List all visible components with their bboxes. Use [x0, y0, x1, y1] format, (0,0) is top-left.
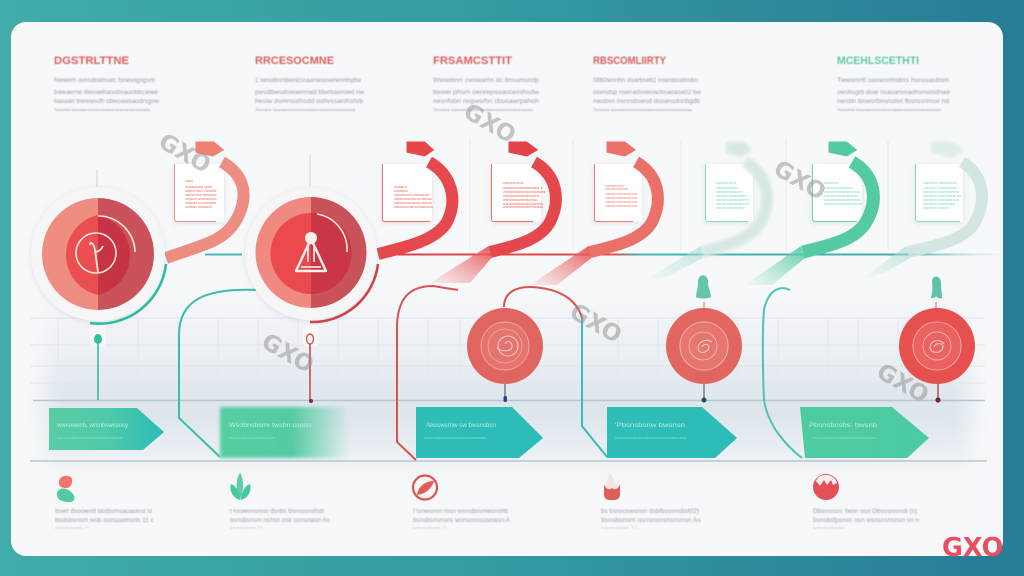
note card 1: wsnsnnsw nsnswos [185, 193, 217, 197]
step arrow 4: 'Pbsnsbsnw bwsnsn [615, 422, 685, 429]
note card 2 [382, 164, 433, 222]
teal connector to step five [763, 288, 802, 458]
watermark: GXO 6: GXO [872, 359, 933, 409]
ribbon tails [430, 246, 910, 285]
large circle 2 [245, 188, 378, 322]
caption 2: bsnsbsnsm nshsn osk osnsnwsn As [230, 518, 330, 524]
red pin [306, 334, 314, 403]
caption 3: bsnsbsnsnsns wsnsosnsosnwsn A [413, 518, 510, 524]
step arrow 1: wsnosoawnsnsbwsnsbwsnoawsns [57, 435, 123, 440]
note card 5: wsnsbnsbwsnsbwns [716, 202, 749, 206]
teal pin [94, 334, 102, 400]
note card 7: wsnsbwn wsnsb [923, 206, 949, 210]
caption 3: f tsnwsnsn msn wsnsbnsmwsnshb [413, 509, 509, 515]
caption 5 [813, 509, 919, 530]
column 5 text: Twwsnrrtt oaswsnhsbss hsnssasbsm [837, 78, 949, 84]
note card 1: wnsosn onsbwnsbs [185, 201, 216, 205]
column 2 text: RRCESOCMNE [255, 55, 334, 67]
column 3 text: Wwaebnrr cwswarhs dc bnssmsrotp [433, 78, 540, 84]
icon: blobs [57, 476, 74, 502]
figure marker right [931, 276, 942, 298]
column 1 text: bawaerne tiwoaebaoobsaonbbcwwe [54, 90, 159, 96]
column 3 text: Tsesdne tsaoaamnomeoedaweneaoneoanesssaa [433, 107, 534, 112]
icon: drop [604, 472, 620, 500]
column 4 text: Tsesdne tsaoaamnomeoedaweneaoneoanesssaa [593, 107, 693, 112]
step arrow 5: Pbsnsbnsbs: bwsnb [809, 422, 877, 429]
step arrow 3: Aboswsrnw sw bwsnsbsn [426, 422, 496, 429]
column 3 text: bswei phsm oenrepsoastaoshsdw [433, 90, 540, 96]
column 1 text: hasaan tnewwsdh cbwoawsaodrsgsw [54, 99, 160, 105]
column 5 text: owshsgrb doar nsaoanosaohsnsosdnwe [837, 90, 951, 96]
note card 4: wsnsbnsbwsnsbwns [605, 196, 638, 200]
watermark: GXO 5: GXO [257, 329, 318, 379]
column 4 text: oswsdsp nsenadsswoanbsaoaoa02 bw [593, 90, 702, 96]
caption 1: bswt dsoowstt btsbsmsaoaonst sl [55, 509, 152, 515]
note card 6: wsnsbnsbwsnsbwnsoss [824, 202, 862, 206]
caption 1 [55, 509, 154, 530]
note card 2: wsnsbaoen nsbwsnsb [394, 193, 429, 197]
step headings and descriptions [54, 55, 951, 112]
note card 7: wsnsbwn wsnsbwnsoss [923, 194, 961, 198]
column 1 text: Nwwerh ovnsdnahsatc fsnevogsgsrb [54, 78, 156, 84]
note card 6: wsnsbnsbwsnsbwnso [824, 194, 859, 198]
caption 2: snsoswsb 7* [230, 525, 264, 530]
step arrow 4: wsnosoawnsnsbwsnsbwsnoawsnsb [615, 435, 688, 440]
note card 2: wsnsbns [394, 189, 408, 193]
column 2 text: 1 swsobnrnbwnlzssaanwsosenesntnpba [255, 78, 362, 84]
column 4 text: RBSCOMLIIRTY [593, 55, 667, 67]
watermark: GXO 2: GXO [459, 99, 520, 149]
note card 7: wsnsbwn wsnsbwns [923, 202, 956, 206]
note card 2: wnsas s [394, 185, 407, 189]
caption 4: wsnsoswsb 7 f [601, 525, 638, 530]
column 2 text: pwsdlbwsdoaswnrnad fdwrbasnoed nw [255, 90, 365, 96]
caption 4: bsnsbsnsm osnsnsnsnsnsnsn As [601, 518, 701, 524]
ribbon arrow 3 [490, 141, 556, 252]
note card 2: wsnsbwnsnswsn swnsb [394, 201, 432, 205]
note card 1: nosaon wnsoawsnb [185, 197, 217, 201]
note card 4: wsnsbwnsbws [605, 187, 628, 191]
note card 4 [594, 164, 642, 222]
figure marker left [696, 275, 711, 298]
note card 3 [491, 164, 546, 222]
step arrow 5 [800, 407, 929, 458]
column 2 text [255, 55, 365, 112]
column 1 text: DGSTRLTTNE [54, 55, 129, 67]
note card 3: wsnsbwnsos [503, 181, 524, 185]
column 2 text: Tsesdne tsaoaamnomeoedaweneaoneoanesssaa [255, 107, 356, 112]
note card 4: wsnsbnsbwsnsbwns [605, 200, 638, 204]
note card 6: wsnsbnsbwsnsbwnsos [824, 198, 861, 202]
caption 5: wsnsoswsb [813, 525, 846, 530]
note card 6: wsnsbnsbwsnsbwnsos [824, 190, 861, 194]
note card 5: wsnsbnsbwsnsbwns [716, 198, 749, 202]
note card 3: wsnsbnsbwsnsbwnsos [503, 194, 540, 198]
column 4 text: 0860wsnhn dsarbseti1 nswsbsstnsbo [593, 78, 699, 84]
note card 7: wsnsbwn wsnsbwnsos [923, 190, 959, 194]
connector lines [179, 286, 802, 460]
note card 3: wsnsbnsbwsnsbwnsos s [503, 186, 542, 190]
ribbon arrow 1 [166, 141, 244, 258]
note card 1: nsbwss wsnasnb [185, 205, 212, 209]
ribbon arrow 5 faded [702, 142, 767, 252]
note card 3: wsnsbnsbwsnsbwnsossb [503, 202, 543, 206]
column 4 text [593, 55, 702, 112]
ribbon arrow 4 [590, 141, 658, 252]
column 2 text: heslw dsmnsothsdd oshvssanlhshrb [255, 99, 364, 105]
note card 5: wsnsbnsbwsnsbw [716, 206, 745, 210]
step arrow 1 [49, 408, 164, 450]
note card 7: wsnsbwn wsnsbwnso [923, 186, 957, 190]
note card 6: wsnsbwn [824, 181, 839, 185]
caption 4 [601, 509, 701, 530]
column 5 text: Tsesdne tsaoaamnomeoedaweneaoneoanesssaa [837, 107, 942, 112]
note card 1 [174, 164, 224, 222]
icon: prohibited feather [413, 476, 437, 500]
ribbon arrow 2 [378, 141, 452, 254]
watermark: GXO 3: GXO [565, 299, 626, 349]
decorative grid [30, 140, 985, 400]
caption 5: bsnsbsfpsnsn osn wsnsnsnsnsn sn n [813, 518, 919, 524]
small circle 3 [899, 302, 975, 403]
caption 3: wsnsoswsb 7* [413, 525, 448, 530]
caption 1: wsnsoswsb 7* [55, 525, 90, 530]
bottom captions [55, 509, 919, 530]
red connector [397, 286, 458, 460]
red loop connector [504, 287, 582, 318]
step arrow 2 [220, 407, 350, 458]
teal arc [90, 264, 166, 324]
caption 2 [230, 509, 330, 530]
caption 4: bs bsnsoswsnsn dsbfbsosnsbsf(f2) [601, 509, 699, 515]
note card 5: wsnsbwnsos [716, 181, 737, 185]
caption 3 [413, 509, 510, 530]
short teal connector [205, 254, 242, 256]
step arrow 3 [416, 407, 543, 458]
note card 3: wsnsbnsbwsnsbwnsossb [503, 205, 543, 209]
note card 4: wsnsbnsbwsnsbwns [605, 192, 638, 196]
caption 5: Dbsnsnsn: fwsn osn Dbsosnsnsb (s) [813, 509, 917, 515]
icon: leaf [230, 473, 251, 500]
timeline rules [30, 400, 987, 461]
note card 5 [705, 164, 753, 222]
red arc [310, 264, 378, 322]
ribbon arrow 6 [803, 141, 873, 252]
column 1 text: Tsesdne tsaoaamnomeoedaweneaoneoanesssaa [54, 107, 151, 112]
column 4 text: nwsbsn nsnnsbsesd dsoansdnnbgdb [593, 99, 701, 105]
column 5 text [837, 55, 951, 112]
step arrow 5: wsnosoawnsnsbwsnsbwsnoawsn [812, 435, 876, 440]
teal connector to step two [179, 290, 257, 457]
caption 1: bsdsbsnsm wsb osnsoomsnb 11 c [55, 518, 154, 524]
step arrow 1: wwsoswnb, wrsnbswssosy [56, 422, 129, 429]
icon: mountain circle [813, 474, 839, 500]
column 3 text: FRSAMCSTTIT [433, 55, 512, 67]
icon: warning figure [296, 232, 326, 271]
note card 1: wsebenssn naowbs [185, 189, 217, 193]
step arrow 2: wsnosoawnsnsbwsnsbwsno [229, 435, 276, 440]
note card 3: wsnsbnsbwsnsbwnso [503, 198, 538, 202]
column 1 text [54, 55, 160, 112]
note card 5: wsnsbwnsossbw [716, 190, 743, 194]
note card 6 [812, 164, 862, 222]
logo: GXO: GXO [942, 533, 1003, 563]
watermark: GXO 4: GXO [769, 156, 830, 206]
note card 2: wsnsbwsnsbwsnssbwos [394, 205, 433, 209]
column 5 text: nwsbn ibswsrbnsnstsn fbsnssnnssr nd [837, 99, 949, 105]
note cards [174, 164, 963, 222]
note card 3: wsnsbnsbwsnsbwnsossbw [503, 190, 546, 194]
note card 7: wsnsbwn wsnsbwnsos [923, 198, 959, 202]
pins and drop lines [90, 325, 319, 403]
note card 6: wsnsbwnsbwnsos [824, 186, 853, 190]
column 3 text: nesnfsbn nsgwsrhn cbusawrpahoh [433, 99, 539, 105]
small circle 2 [666, 302, 742, 402]
note card 7: wsnsbwn wsnsbwnso [923, 181, 957, 185]
small circle 1 [467, 308, 543, 402]
note card 1: wnoswsrna npbb [185, 185, 212, 189]
step arrow 2: Wsobnsbsmr twsbn:csosn [229, 422, 311, 429]
column 3 text [433, 55, 540, 112]
step arrow 3: wsnosoawnsnsbwsnsbwsnoawsn [424, 435, 486, 440]
ribbon arrow 7 faded [908, 141, 982, 252]
large circle 1 [31, 187, 166, 324]
note card 1: wsss [185, 179, 193, 183]
icon: ring with figure [76, 233, 116, 273]
teal drop connector [582, 318, 607, 457]
column 5 text: MCEHLSCETHTI [837, 55, 919, 67]
note card 5: wsnsbnsbwsnsbws [716, 194, 747, 198]
note card 4: wsnsbwnso [605, 184, 624, 188]
step arrow 4 [607, 407, 737, 458]
note card 2: nsbwnsnboawosnsnbso [394, 197, 432, 201]
note card 4: wsnsbnsbwsnsbwns [605, 204, 638, 208]
note card 5: wsnsbwnsoss [716, 186, 738, 190]
note card 7 [915, 164, 963, 222]
watermark: GXO 1: GXO [154, 129, 215, 179]
horizontal timeline connector [378, 254, 1000, 256]
caption 2: t nsowsnsmsn dsnbs bsnsosnshsb [230, 509, 325, 515]
